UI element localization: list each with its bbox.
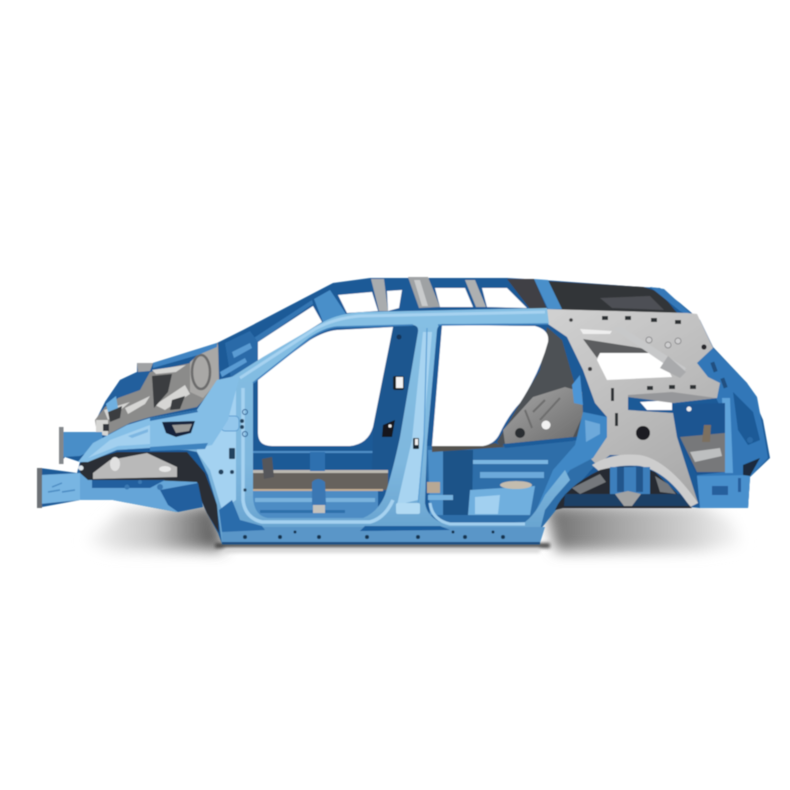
front window [258,327,393,446]
engine bay [95,343,219,436]
tan floor patch [427,482,440,493]
upper dark floor [250,446,395,472]
rear wheel house [497,327,585,448]
A pillar inner stripe [243,300,313,350]
dark tail lamp pocket [733,392,760,445]
pillar details [218,410,248,492]
rear roof blue hoop [534,279,562,309]
centre bracket [615,491,641,506]
rear window [432,325,548,446]
dark grey roof bow [507,279,547,309]
window openings [258,325,548,446]
windshield opening [258,306,322,362]
window slit [640,400,672,410]
dark band above quarter glass [583,339,657,358]
lower rail [80,473,203,512]
wheel arch band [592,454,698,507]
navy lower band [564,494,690,506]
small dots [588,367,592,371]
blue underbody centre [610,467,650,494]
top rail highlight [240,312,545,378]
car body [37,277,770,544]
seat bracket [262,457,274,479]
light blue door ring [150,308,570,544]
light column [722,398,733,473]
hinge pillar light panel [197,380,236,510]
strut tower [190,345,219,398]
lower rib shadow [628,392,716,403]
slots [602,316,696,426]
dark sill corners [219,500,265,532]
upper flange [59,427,64,464]
luggage interior [672,403,725,475]
grey suspension tower [93,453,177,479]
fender front tip [78,466,84,470]
floor blue top edge [503,437,573,448]
dark wheel well [80,452,219,533]
navy floor column [443,450,473,515]
windshield header bracket [314,290,346,322]
D pillar blue [696,348,768,508]
fender inner vent [162,421,195,437]
sunroof openings [338,292,378,313]
blue roof edge at tailgate [650,287,700,322]
sill [222,527,545,544]
upper crash box [63,432,103,457]
strut plate [221,416,239,431]
dark rear roof panel [545,281,678,314]
B pillar highlight [397,332,432,505]
seat cross member [312,479,326,505]
rear floor [425,440,600,530]
rear door ring highlight [430,503,525,524]
tail panel box [697,475,750,508]
B pillar inner [372,324,418,470]
wheel house dome [503,387,583,444]
rear door interior [425,440,600,530]
radiator bracket [96,420,108,436]
A pillar highlight [243,388,393,522]
B pillar foot [396,503,420,514]
rear quarter blue panel [505,412,607,543]
rear floor highlights [468,486,535,515]
brace [612,326,686,376]
blue wheel house bracket [572,375,583,405]
front door interior [250,446,395,518]
fender highlight [88,425,150,458]
grey floor pan [500,481,532,489]
dark wheel house surround [497,327,585,446]
tailgate opening slots [710,362,718,372]
large round hole [636,426,650,440]
lower blue floor [253,491,378,518]
lower crash box [40,473,80,504]
engine bay mass [95,343,219,435]
lower black notch [743,458,760,476]
upper front rail [59,427,103,464]
crash box details [48,483,75,492]
bay dark streaks [108,374,185,422]
blue cowl edge [105,372,150,406]
roof structure [220,277,700,385]
front wheel arch and lower rail [37,452,219,533]
rear underbody [555,466,692,510]
hood hinge bracket [137,363,153,372]
grey floor section [253,472,388,490]
ground shadow [85,505,742,553]
front fender [78,375,240,470]
dark sill line [432,443,505,452]
well upper liner [572,474,676,494]
rear grey quarter panel [545,309,720,507]
body silhouette [37,278,770,544]
sill dots [243,530,505,539]
white highlight [580,329,612,334]
bay highlights [104,365,190,420]
lower flange [37,468,42,508]
grey roof bows [371,279,388,311]
tailgate area [672,348,768,508]
fender lower edge [150,443,208,451]
dark well under arch [555,466,692,510]
quarter window [597,353,672,380]
